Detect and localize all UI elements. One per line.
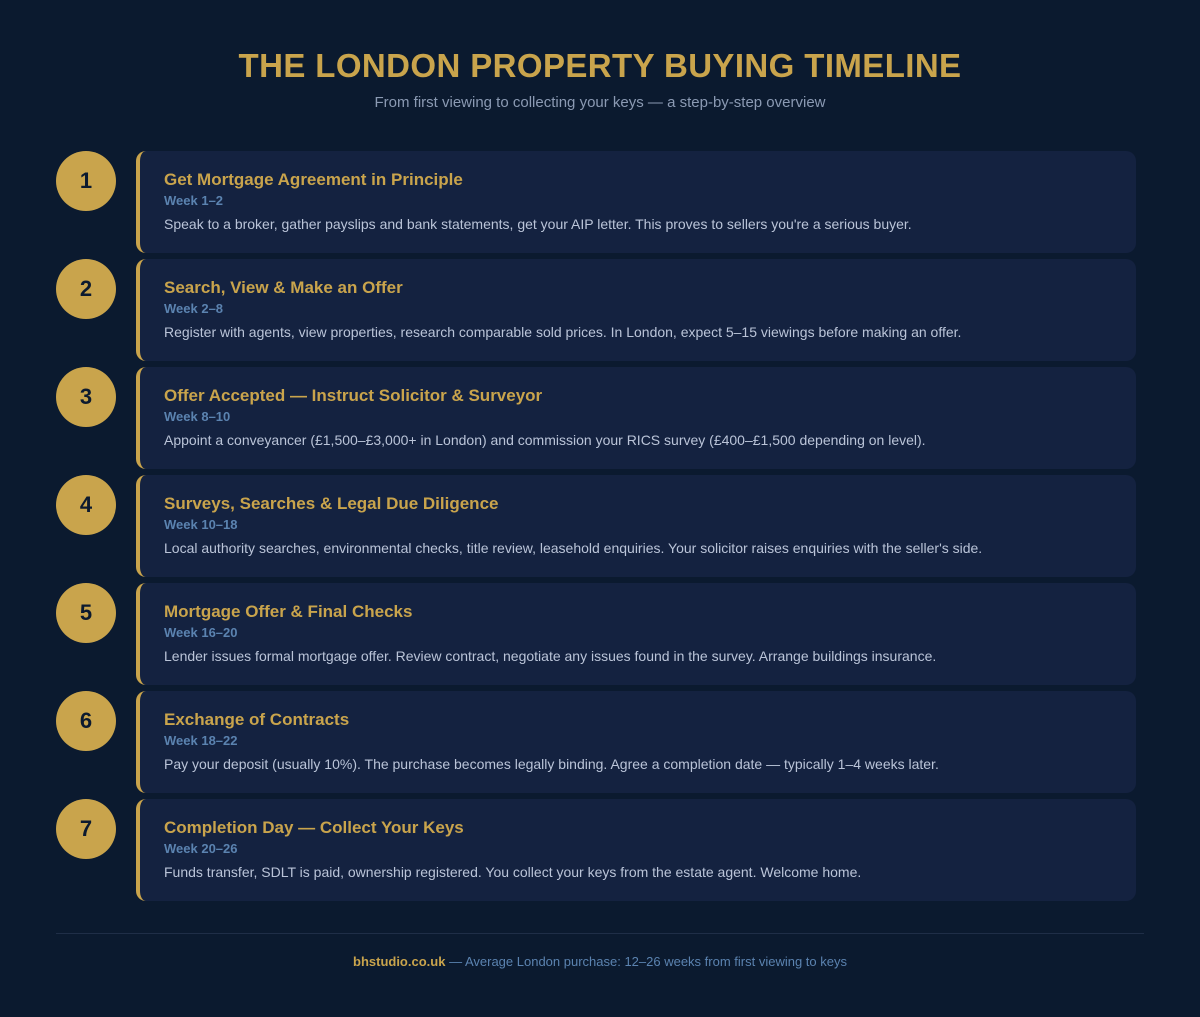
card 3: Week 8–10 — [164, 409, 230, 424]
card 6: Pay your deposit (usually 10%). The purchase becomes legally binding. Agree a completion date — typically 1–4 weeks later. — [164, 756, 939, 772]
step 3 — [56, 367, 1136, 469]
subtitle: From first viewing to collecting your keys — a step-by-step overview — [374, 94, 826, 111]
card 7: Week 20–26 — [164, 841, 238, 856]
card 4: Week 10–18 — [164, 517, 238, 532]
card 7 — [136, 799, 1136, 901]
card 5: Lender issues formal mortgage offer. Review contract, negotiate any issues found in the survey. Arrange buildings insurance. — [164, 648, 936, 664]
step 2 — [56, 259, 1136, 361]
icon: number 6: 6 — [80, 708, 92, 733]
icon: number 1: 1 — [80, 168, 92, 193]
step 7 — [56, 799, 1136, 901]
icon: number 7: 7 — [80, 816, 92, 841]
icon: number 2 — [56, 259, 116, 319]
card 5: Week 16–20 — [164, 625, 238, 640]
card 6: Week 18–22 — [164, 733, 238, 748]
card 2: Search, View & Make an Offer — [164, 278, 403, 297]
icon: number 3: 3 — [80, 384, 92, 409]
card 5 — [136, 583, 1136, 685]
icon: number 3 — [56, 367, 116, 427]
card 4: Surveys, Searches & Legal Due Diligence — [164, 494, 498, 513]
card 7: Funds transfer, SDLT is paid, ownership registered. You collect your keys from the estate agent. Welcome home. — [164, 864, 861, 880]
card 1: Speak to a broker, gather payslips and bank statements, get your AIP letter. This proves to sellers you're a serious buyer. — [164, 216, 912, 232]
footer: bhstudio.co.uk — Average London purchase: 12–26 weeks from first viewing to keys — [353, 954, 847, 969]
icon: number 5: 5 — [80, 600, 92, 625]
card 2 — [136, 259, 1136, 361]
icon: number 1 — [56, 151, 116, 211]
card 6: Exchange of Contracts — [164, 710, 349, 729]
icon: number 4: 4 — [80, 492, 92, 517]
card 2: Week 2–8 — [164, 301, 223, 316]
card 5: Mortgage Offer & Final Checks — [164, 602, 412, 621]
icon: number 4 — [56, 475, 116, 535]
title: THE LONDON PROPERTY BUYING TIMELINE — [239, 47, 961, 84]
card 1: Get Mortgage Agreement in Principle — [164, 170, 463, 189]
card 3 — [136, 367, 1136, 469]
step 1 — [56, 151, 1136, 253]
step 4 — [56, 475, 1136, 577]
card 1 — [136, 151, 1136, 253]
card 1: Week 1–2 — [164, 193, 223, 208]
card 3: Appoint a conveyancer (£1,500–£3,000+ in London) and commission your RICS survey (£400–£1,500 depending on level). — [164, 432, 926, 448]
icon: number 2: 2 — [80, 276, 92, 301]
icon: number 5 — [56, 583, 116, 643]
card 7: Completion Day — Collect Your Keys — [164, 818, 464, 837]
card 3: Offer Accepted — Instruct Solicitor & Surveyor — [164, 386, 542, 405]
icon: number 7 — [56, 799, 116, 859]
step 6 — [56, 691, 1136, 793]
icon: number 6 — [56, 691, 116, 751]
card 4 — [136, 475, 1136, 577]
card 2: Register with agents, view properties, research comparable sold prices. In London, expect 5–15 viewings before making an offer. — [164, 324, 961, 340]
card 6 — [136, 691, 1136, 793]
card 4: Local authority searches, environmental checks, title review, leasehold enquiries. Your solicitor raises enquiries with the seller's side. — [164, 540, 982, 556]
step 5 — [56, 583, 1136, 685]
